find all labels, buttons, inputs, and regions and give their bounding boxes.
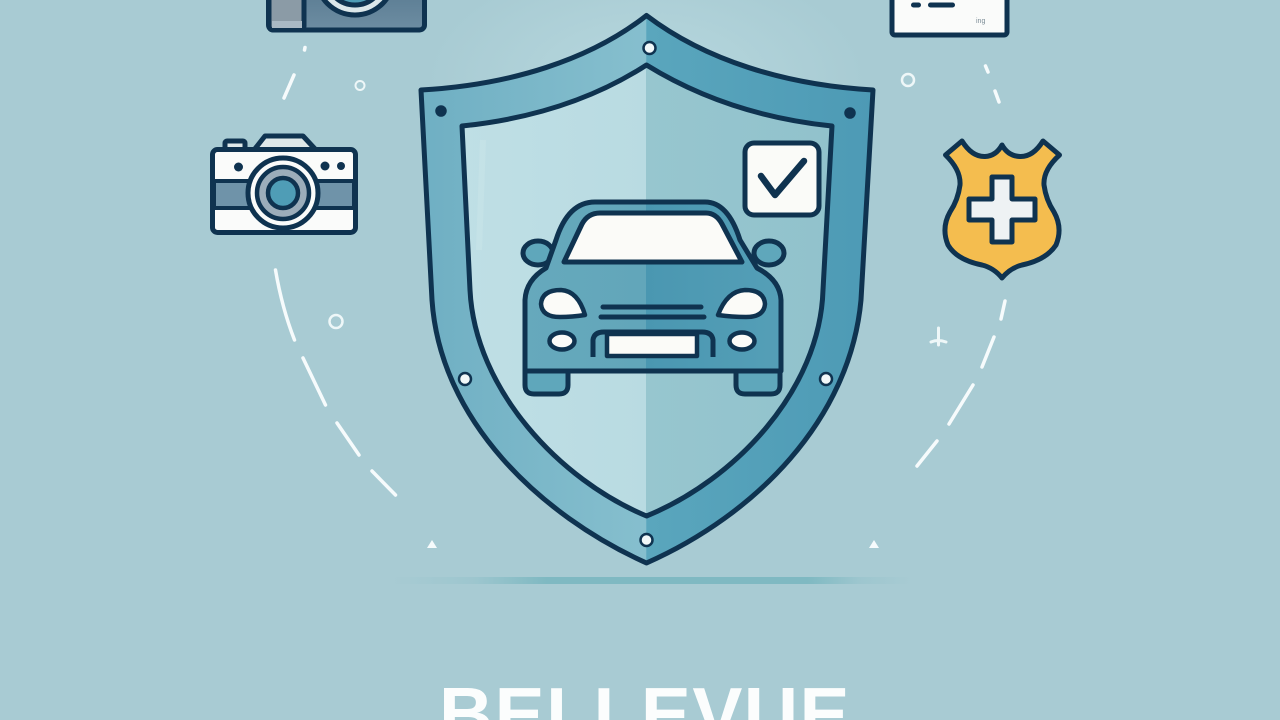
- car windshield: [564, 213, 742, 262]
- car grille: [601, 307, 704, 317]
- ground shadow: [390, 577, 912, 584]
- car mirrors: [523, 241, 553, 265]
- car body: [525, 202, 781, 371]
- icon: car: [523, 202, 784, 394]
- shield inner panel: [462, 65, 832, 516]
- icon: document card top right: [892, 0, 1007, 35]
- icon: check box: [745, 143, 819, 215]
- dashed arc left: [276, 48, 396, 495]
- dashed arc right: [917, 66, 1005, 466]
- car number plate: [593, 332, 713, 357]
- car wheels: [525, 371, 780, 394]
- shield: [421, 16, 873, 563]
- icon: document card top right: ing: [976, 18, 985, 25]
- icon: gold badge with cross: [945, 141, 1060, 278]
- icon: camera left: [212, 136, 356, 232]
- car headlights: [541, 290, 765, 350]
- small decorative marks: [330, 74, 946, 548]
- shield outer band: [421, 16, 873, 563]
- shield rivets: [436, 42, 854, 546]
- icon: partial camera top: [268, 0, 424, 30]
